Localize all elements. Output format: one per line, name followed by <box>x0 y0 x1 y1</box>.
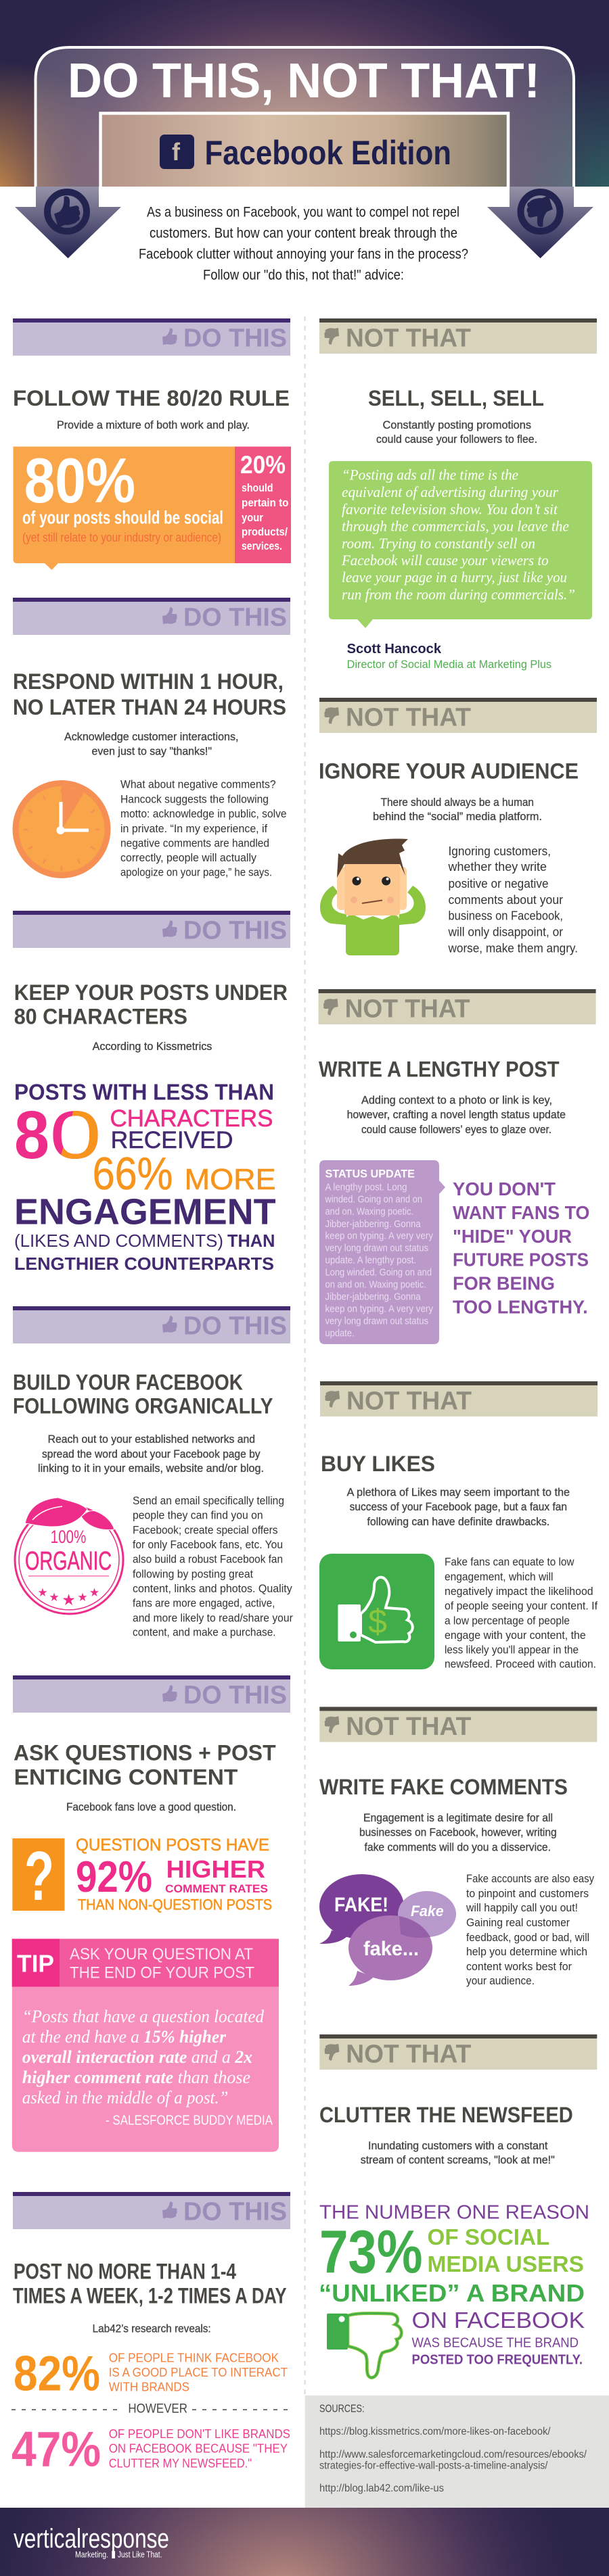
heading <box>14 1740 276 1790</box>
icon: 100% organic badge: ★ <box>62 1591 76 1608</box>
subheading: A plethora of Likes may seem important to the <box>347 1486 570 1499</box>
body text: content works best for <box>466 1960 572 1973</box>
statistic: 80 characters engagement: LENGTHIER COUNTERPARTS <box>14 1254 274 1274</box>
status update card: update. <box>325 1328 355 1339</box>
callout: 20 percent: pertain to <box>242 496 288 509</box>
statistic: 47%: 47% <box>12 2422 101 2477</box>
intro text <box>139 204 468 283</box>
statistic: 73% unliked a brand: POSTED TOO FREQUENTLY. <box>411 2353 583 2368</box>
statistic: 80 characters engagement: ENGAGEMENT <box>14 1192 276 1233</box>
icon: thumbs up with dollar sign: $ <box>368 1602 387 1640</box>
statistic: 80 characters engagement: 0 <box>49 1097 102 1173</box>
banner: do this 2: DO THIS <box>183 603 287 631</box>
status update card: A lengthy post. Long <box>325 1182 407 1193</box>
heading: POST NO MORE THAN 1-4 <box>14 2260 236 2284</box>
attribution: Scott Hancock <box>347 642 442 657</box>
subheading: Adding context to a photo or link is key, <box>361 1094 552 1107</box>
statistic: 80 characters engagement: RECEIVED <box>111 1127 233 1153</box>
subheading: following can have definite drawbacks. <box>367 1515 549 1528</box>
icon: fake speech bubbles: Fake <box>411 1903 444 1919</box>
status update card: Jibber-jabbering. Gonna <box>325 1291 421 1303</box>
status update card: and on. Waxing poetic. <box>325 1206 413 1218</box>
arrow: not that <box>487 187 593 258</box>
body text: Send an email specifically telling <box>133 1494 284 1507</box>
status update card <box>319 1160 445 1344</box>
subheading: linking to it in your emails, website and/or blog. <box>38 1462 264 1475</box>
heading <box>14 980 288 1029</box>
statistic: 92% higher comment rates: THAN NON-QUESTION POSTS <box>78 1896 272 1913</box>
tip panel: ASK YOUR QUESTION AT <box>70 1945 253 1963</box>
heading <box>13 669 286 719</box>
statistic: 73% unliked a brand: WAS BECAUSE THE BRAND <box>411 2336 579 2351</box>
icon: man covering ears <box>320 839 426 955</box>
status update card: keep on typing. A very very <box>325 1304 433 1315</box>
body text: newsfeed. Proceed with caution. <box>445 1658 596 1671</box>
body text: help you determine which <box>466 1945 587 1958</box>
panel: keep your posts under 80 characters <box>14 980 288 1274</box>
panel: buy likes <box>319 1452 597 1671</box>
logo: verticalresponse: Just Like That. <box>118 2550 162 2560</box>
status update card: keep on typing. A very very <box>325 1231 433 1242</box>
panel: sources: http://blog.lab42.com/like-us <box>319 2483 444 2494</box>
subheading: Facebook fans love a good question. <box>66 1800 236 1813</box>
status update card: winded. Going on and on <box>325 1194 422 1206</box>
tip panel: asked in the middle of a post.” <box>22 2088 228 2107</box>
panel: sources: strategies-for-effective-wall-posts-a-timeline-analysis/ <box>319 2460 548 2472</box>
statistic: 82%: 82% <box>14 2347 100 2402</box>
body text: fans are more engaged, active, <box>133 1597 275 1610</box>
logo: verticalresponse: verticalresponse <box>14 2524 169 2554</box>
banner: do this 6 <box>13 2192 290 2229</box>
quote bubble: through the commercials, you leave the <box>342 518 569 535</box>
body text: apologize on your page,” he says. <box>120 866 272 879</box>
callout: 80 percent: 80% <box>24 445 135 516</box>
quote bubble: favorite television show. You don’t sit <box>342 500 558 517</box>
callout: 80 percent: of your posts should be social <box>22 507 223 527</box>
body text: negatively impact the likelihood <box>445 1585 593 1598</box>
banner: not that 1: NOT THAT <box>346 325 471 353</box>
body text: Fake accounts are also easy <box>466 1872 594 1885</box>
body text: will happily call you out! <box>466 1901 578 1914</box>
body text: motto: acknowledge in public, solve <box>120 807 287 820</box>
callout: 20 percent: your <box>242 511 263 524</box>
body text <box>120 778 287 879</box>
tip panel: at the end have a 15% higher <box>22 2027 227 2047</box>
statistic: 73% unliked a brand: ON FACEBOOK <box>411 2308 585 2333</box>
quote bubble: equivalent of advertising during your <box>342 483 558 500</box>
subheading <box>347 1094 566 1136</box>
subheading <box>359 1811 557 1854</box>
icon: fake speech bubbles <box>319 1874 456 1986</box>
subheading: Acknowledge customer interactions, <box>64 730 238 743</box>
icon: 100% organic badge: ★ <box>49 1591 60 1604</box>
panel: write a lengthy post <box>319 1057 589 1344</box>
heading: ASK QUESTIONS + POST <box>14 1740 276 1765</box>
body text: less likely you'll appear in the <box>445 1644 579 1656</box>
subheading: Engagement is a legitimate desire for all <box>363 1811 553 1824</box>
intro text: As a business on Facebook, you want to compel not repel <box>147 204 459 220</box>
callout: don't want fans to hide posts: FOR BEING <box>453 1273 555 1294</box>
banner: do this 3 <box>13 911 290 948</box>
panel: post no more than 1-4 times a week <box>12 2260 290 2477</box>
body text: and more likely to read/share your <box>133 1611 293 1624</box>
statistic: 47%: CLUTTER MY NEWSFEED." <box>109 2456 252 2470</box>
subheading: stream of content screams, "look at me!" <box>361 2153 555 2166</box>
intro text: Follow our "do this, not that!" advice: <box>203 268 404 283</box>
callout: don't want fans to hide posts <box>453 1178 589 1317</box>
tip panel: - SALESFORCE BUDDY MEDIA <box>106 2113 273 2128</box>
body text: will only disappoint, or <box>448 925 563 938</box>
body text: Hancock suggests the following <box>120 793 269 806</box>
body text: Facebook; create special offers <box>133 1523 277 1536</box>
statistic: 73% unliked a brand: OF SOCIAL <box>428 2224 549 2249</box>
body text: Gaining real customer <box>466 1916 570 1929</box>
quote bubble <box>329 461 592 628</box>
banner: do this 1 <box>13 318 290 356</box>
banner: not that 5: NOT THAT <box>346 1713 471 1741</box>
icon: 100% organic badge: 100% <box>51 1527 86 1547</box>
icon: fake speech bubbles: FAKE! <box>334 1894 388 1916</box>
tip panel: THE END OF YOUR POST <box>70 1963 254 1982</box>
panel: build your facebook following organically <box>13 1370 293 1638</box>
heading: FOLLOW THE 80/20 RULE <box>13 386 290 410</box>
logo: verticalresponse: Marketing. <box>75 2550 108 2560</box>
body text: What about negative comments? <box>120 778 276 791</box>
subheading: Provide a mixture of both work and play. <box>57 419 250 431</box>
statistic: 47%: ON FACEBOOK BECAUSE "THEY <box>109 2442 288 2456</box>
status update card: Long winded. Going on and <box>325 1267 432 1279</box>
heading: RESPOND WITHIN 1 HOUR, <box>13 669 284 694</box>
subheading: According to Kissmetrics <box>93 1040 212 1053</box>
panel: sources: https://blog.kissmetrics.com/more-likes-on-facebook/ <box>319 2426 551 2437</box>
heading: BUY LIKES <box>321 1452 435 1476</box>
icon: clock <box>16 783 108 875</box>
subheading: even just to say "thanks!" <box>92 745 212 757</box>
banner: do this 4 <box>13 1306 290 1343</box>
intro text: Facebook clutter without annoying your fans in the process? <box>139 246 468 262</box>
footer panel <box>0 2508 609 2576</box>
banner: not that 1 <box>319 318 597 354</box>
heading: SELL, SELL, SELL <box>368 386 544 410</box>
statistic: 92% higher comment rates: COMMENT RATES <box>165 1882 268 1895</box>
statistic: 73% unliked a brand: “UNLIKED” A BRAND <box>319 2279 585 2307</box>
body text: for only Facebook fans, etc. You <box>133 1538 283 1551</box>
statistic: 82%: OF PEOPLE THINK FACEBOOK <box>109 2351 279 2364</box>
icon: 100% organic badge <box>15 1498 123 1614</box>
subheading <box>361 2139 555 2166</box>
body text: engage with your content, the <box>445 1629 586 1642</box>
icon: 100% organic badge: ORGANIC <box>25 1547 112 1576</box>
banner: not that 6 <box>319 2034 597 2070</box>
heading: KEEP YOUR POSTS UNDER <box>14 980 288 1005</box>
body text: also build a robust Facebook fan <box>133 1553 283 1566</box>
callout: 20 percent: should <box>242 481 273 494</box>
subheading: fake comments will do you a disservice. <box>364 1840 551 1854</box>
banner: not that 4 <box>320 1381 597 1416</box>
callout: 20 percent <box>235 446 291 563</box>
statistic: 80 characters engagement: 8 <box>14 1097 49 1173</box>
subheading: Constantly posting promotions <box>383 419 531 431</box>
panel: respond within 1 hour <box>13 669 287 879</box>
subheading <box>376 419 537 446</box>
banner: do this 4: DO THIS <box>183 1312 287 1340</box>
status update card: Jibber-jabbering. Gonna <box>325 1218 421 1230</box>
tip panel <box>12 1939 279 2152</box>
statistic: 82%: IS A GOOD PLACE TO INTERACT <box>109 2366 288 2379</box>
statistic: 92% higher comment rates <box>76 1836 272 1913</box>
status update card: very long drawn out status <box>325 1243 428 1254</box>
subheading: behind the “social” media platform. <box>373 810 542 823</box>
heading <box>13 1370 273 1418</box>
quote bubble: “Posting ads all the time is the <box>342 467 518 483</box>
body text: feedback, good or bad, will <box>466 1931 589 1944</box>
statistic: 82% <box>14 2347 288 2402</box>
edition box <box>100 114 508 187</box>
callout: 20 percent: services. <box>242 540 282 552</box>
subheading: however, crafting a novel length status update <box>347 1108 566 1121</box>
panel: sell, sell, sell <box>329 386 592 671</box>
icon: 100% organic badge: ★ <box>37 1586 48 1599</box>
logo: verticalresponse <box>14 2524 169 2560</box>
body text: people they can find you on <box>133 1509 263 1522</box>
statistic: 80 characters engagement: 0 <box>49 1097 102 1173</box>
banner: do this 1: DO THIS <box>183 325 287 353</box>
body text: business on Facebook, <box>448 909 563 923</box>
icon: 100% organic badge: ★ <box>77 1591 88 1604</box>
statistic: 47% <box>12 2422 290 2477</box>
title: DO THIS, NOT THAT! <box>68 54 540 108</box>
heading: NO LATER THAN 24 HOURS <box>13 695 286 719</box>
heading: BUILD YOUR FACEBOOK <box>13 1370 243 1395</box>
subheading: Reach out to your established networks and <box>48 1433 255 1446</box>
statistic: 82%: WITH BRANDS <box>109 2381 189 2394</box>
status update card: on and on. Waxing poetic. <box>325 1279 426 1291</box>
tip panel: higher comment rate than those <box>22 2068 250 2087</box>
subheading: success of your Facebook page, but a faux fan <box>350 1500 567 1513</box>
divider: however: HOWEVER <box>128 2402 187 2416</box>
panel: write fake comments <box>319 1775 594 1987</box>
body text: to pinpoint and customers <box>466 1887 589 1900</box>
icon: thumbs up with dollar sign <box>319 1554 434 1669</box>
statistic: 80 characters engagement: (LIKES AND COMMENTS) <box>14 1231 223 1251</box>
statistic: 92% higher comment rates: QUESTION POSTS HAVE <box>76 1836 269 1855</box>
tip panel: TIP <box>17 1950 54 1978</box>
panel: sources <box>305 2395 609 2508</box>
callout: 80 percent: (yet still relate to your industry or audience) <box>22 531 221 544</box>
icon: 100% organic badge: ★ <box>89 1586 99 1599</box>
body text: negative comments are handled <box>120 837 269 849</box>
icon: facebook <box>160 135 194 169</box>
icon: thumbs down <box>327 2313 401 2378</box>
callout: don't want fans to hide posts: TOO LENGTHY. <box>453 1296 588 1317</box>
heading: TIMES A WEEK, 1-2 TIMES A DAY <box>13 2284 287 2308</box>
body text <box>445 1556 597 1671</box>
banner: not that 5 <box>319 1707 597 1742</box>
body text: your audience. <box>466 1974 535 1987</box>
subheading: businesses on Facebook, however, writing <box>359 1826 557 1839</box>
heading <box>13 2260 287 2308</box>
callout: 20 percent: products/ <box>242 525 288 538</box>
subtitle: Facebook Edition <box>204 134 451 172</box>
intro text: customers. But how can your content break through the <box>150 226 457 241</box>
heading: WRITE FAKE COMMENTS <box>319 1775 568 1799</box>
callout: don't want fans to hide posts: WANT FANS TO <box>453 1202 589 1223</box>
statistic: 80 characters engagement: 66% <box>93 1148 173 1199</box>
attribution: Director of Social Media at Marketing Plus <box>347 658 551 671</box>
banner: not that 6: NOT THAT <box>346 2041 471 2069</box>
tip panel: “Posts that have a question located <box>22 2007 265 2026</box>
statistic: 73% unliked a brand <box>319 2202 589 2368</box>
statistic: 73% unliked a brand: MEDIA USERS <box>428 2251 584 2276</box>
body text: correctly, people will actually <box>120 851 256 864</box>
banner: do this 2 <box>13 598 290 635</box>
subheading: Inundating customers with a constant <box>368 2139 548 2152</box>
subheading: could cause your followers to flee. <box>376 433 537 446</box>
subheading: could cause followers’ eyes to glaze over. <box>361 1123 551 1136</box>
banner: not that 2: NOT THAT <box>346 703 471 732</box>
subheading: spread the word about your Facebook page by <box>42 1448 261 1460</box>
body text: a low percentage of people <box>445 1614 570 1627</box>
callout: don't want fans to hide posts: "HIDE" YOUR <box>453 1226 572 1247</box>
statistic: 80 characters engagement: CHARACTERS <box>110 1105 273 1132</box>
banner: do this 6: DO THIS <box>183 2197 287 2226</box>
subheading <box>64 730 238 757</box>
panel: clutter the newsfeed <box>319 2103 589 2378</box>
tip panel: overall interaction rate and a 2x <box>22 2047 252 2067</box>
heading: CLUTTER THE NEWSFEED <box>319 2103 573 2127</box>
body text: content, and make a purchase. <box>133 1625 276 1638</box>
banner: do this 3: DO THIS <box>183 917 287 945</box>
status update card: very long drawn out status <box>325 1316 428 1327</box>
quote bubble: leave your page in a hurry, just like you <box>342 569 567 586</box>
panel: follow the 80/20 rule <box>13 386 291 570</box>
callout: 80 percent <box>14 445 235 570</box>
statistic: 80 characters engagement <box>14 1080 276 1274</box>
panel: ask questions + post enticing content <box>12 1740 279 2152</box>
statistic: 73% unliked a brand: 73% <box>319 2219 423 2287</box>
callout: don't want fans to hide posts: YOU DON'T <box>453 1178 556 1199</box>
callout: 20 percent: 20% <box>240 451 286 479</box>
statistic: 80 characters engagement: THAN <box>227 1231 275 1251</box>
heading: WRITE A LENGTHY POST <box>319 1057 560 1082</box>
body text: Fake fans can equate to low <box>445 1556 574 1569</box>
body text: positive or negative <box>448 877 548 890</box>
statistic: 73% unliked a brand: THE NUMBER ONE REASON <box>319 2202 589 2224</box>
body text: of people seeing your content. If <box>445 1600 597 1613</box>
body text <box>133 1494 293 1638</box>
statistic: 92% higher comment rates: HIGHER <box>166 1855 265 1883</box>
subheading <box>373 796 542 823</box>
statistic: 92% higher comment rates: 92% <box>76 1852 152 1901</box>
body text: Ignoring customers, <box>448 844 551 858</box>
subheading: There should always be a human <box>381 796 534 809</box>
callout: don't want fans to hide posts: FUTURE POSTS <box>453 1249 589 1270</box>
statistic: 80 characters engagement: POSTS WITH LESS THAN <box>14 1080 274 1105</box>
heading: ENTICING CONTENT <box>14 1765 238 1790</box>
attribution <box>347 642 551 671</box>
icon: facebook: f <box>172 138 181 166</box>
body text: following by posting great <box>133 1567 253 1580</box>
title arch <box>35 47 574 187</box>
icon: fake speech bubbles: fake... <box>363 1938 419 1960</box>
body text: worse, make them angry. <box>448 942 578 955</box>
header panel <box>0 0 609 187</box>
body text: comments about your <box>448 893 563 907</box>
status update card: STATUS UPDATE <box>325 1168 415 1180</box>
panel: ignore your audience <box>319 759 579 955</box>
arrow: do this <box>15 187 121 258</box>
panel: sources: http://www.salesforcemarketingcloud.com/resources/ebooks/ <box>319 2449 587 2460</box>
subheading <box>38 1433 264 1475</box>
banner: not that 2 <box>319 698 597 733</box>
heading: 80 CHARACTERS <box>14 1005 187 1029</box>
heading: IGNORE YOUR AUDIENCE <box>319 759 579 783</box>
body text: engagement, which will <box>445 1570 554 1583</box>
subheading <box>347 1486 570 1528</box>
subheading: Lab42’s research reveals: <box>93 2322 211 2335</box>
body text: content, links and photos. Quality <box>133 1582 292 1595</box>
banner: not that 3: NOT THAT <box>345 995 470 1024</box>
quote bubble: Facebook will cause your viewers to <box>341 552 549 569</box>
banner: not that 3 <box>319 989 596 1024</box>
body text: whether they write <box>448 860 547 874</box>
banner: not that 4: NOT THAT <box>346 1387 472 1416</box>
statistic: 80 characters engagement: MORE <box>185 1163 276 1196</box>
body text <box>448 844 578 955</box>
panel: sources: SOURCES: <box>319 2404 364 2415</box>
status update card: update. A lengthy post. <box>325 1255 416 1266</box>
banner: do this 5 <box>13 1675 290 1713</box>
body text: in private. “In my experience, if <box>120 822 267 835</box>
icon: question mark: ? <box>24 1837 54 1915</box>
banner: do this 5: DO THIS <box>183 1681 287 1709</box>
statistic: 47%: OF PEOPLE DON'T LIKE BRANDS <box>109 2427 290 2441</box>
body text <box>466 1872 594 1987</box>
heading: FOLLOWING ORGANICALLY <box>13 1394 273 1418</box>
quote bubble: room. Trying to constantly sell on <box>342 535 535 552</box>
quote bubble: run from the room during commercials.” <box>342 586 575 603</box>
